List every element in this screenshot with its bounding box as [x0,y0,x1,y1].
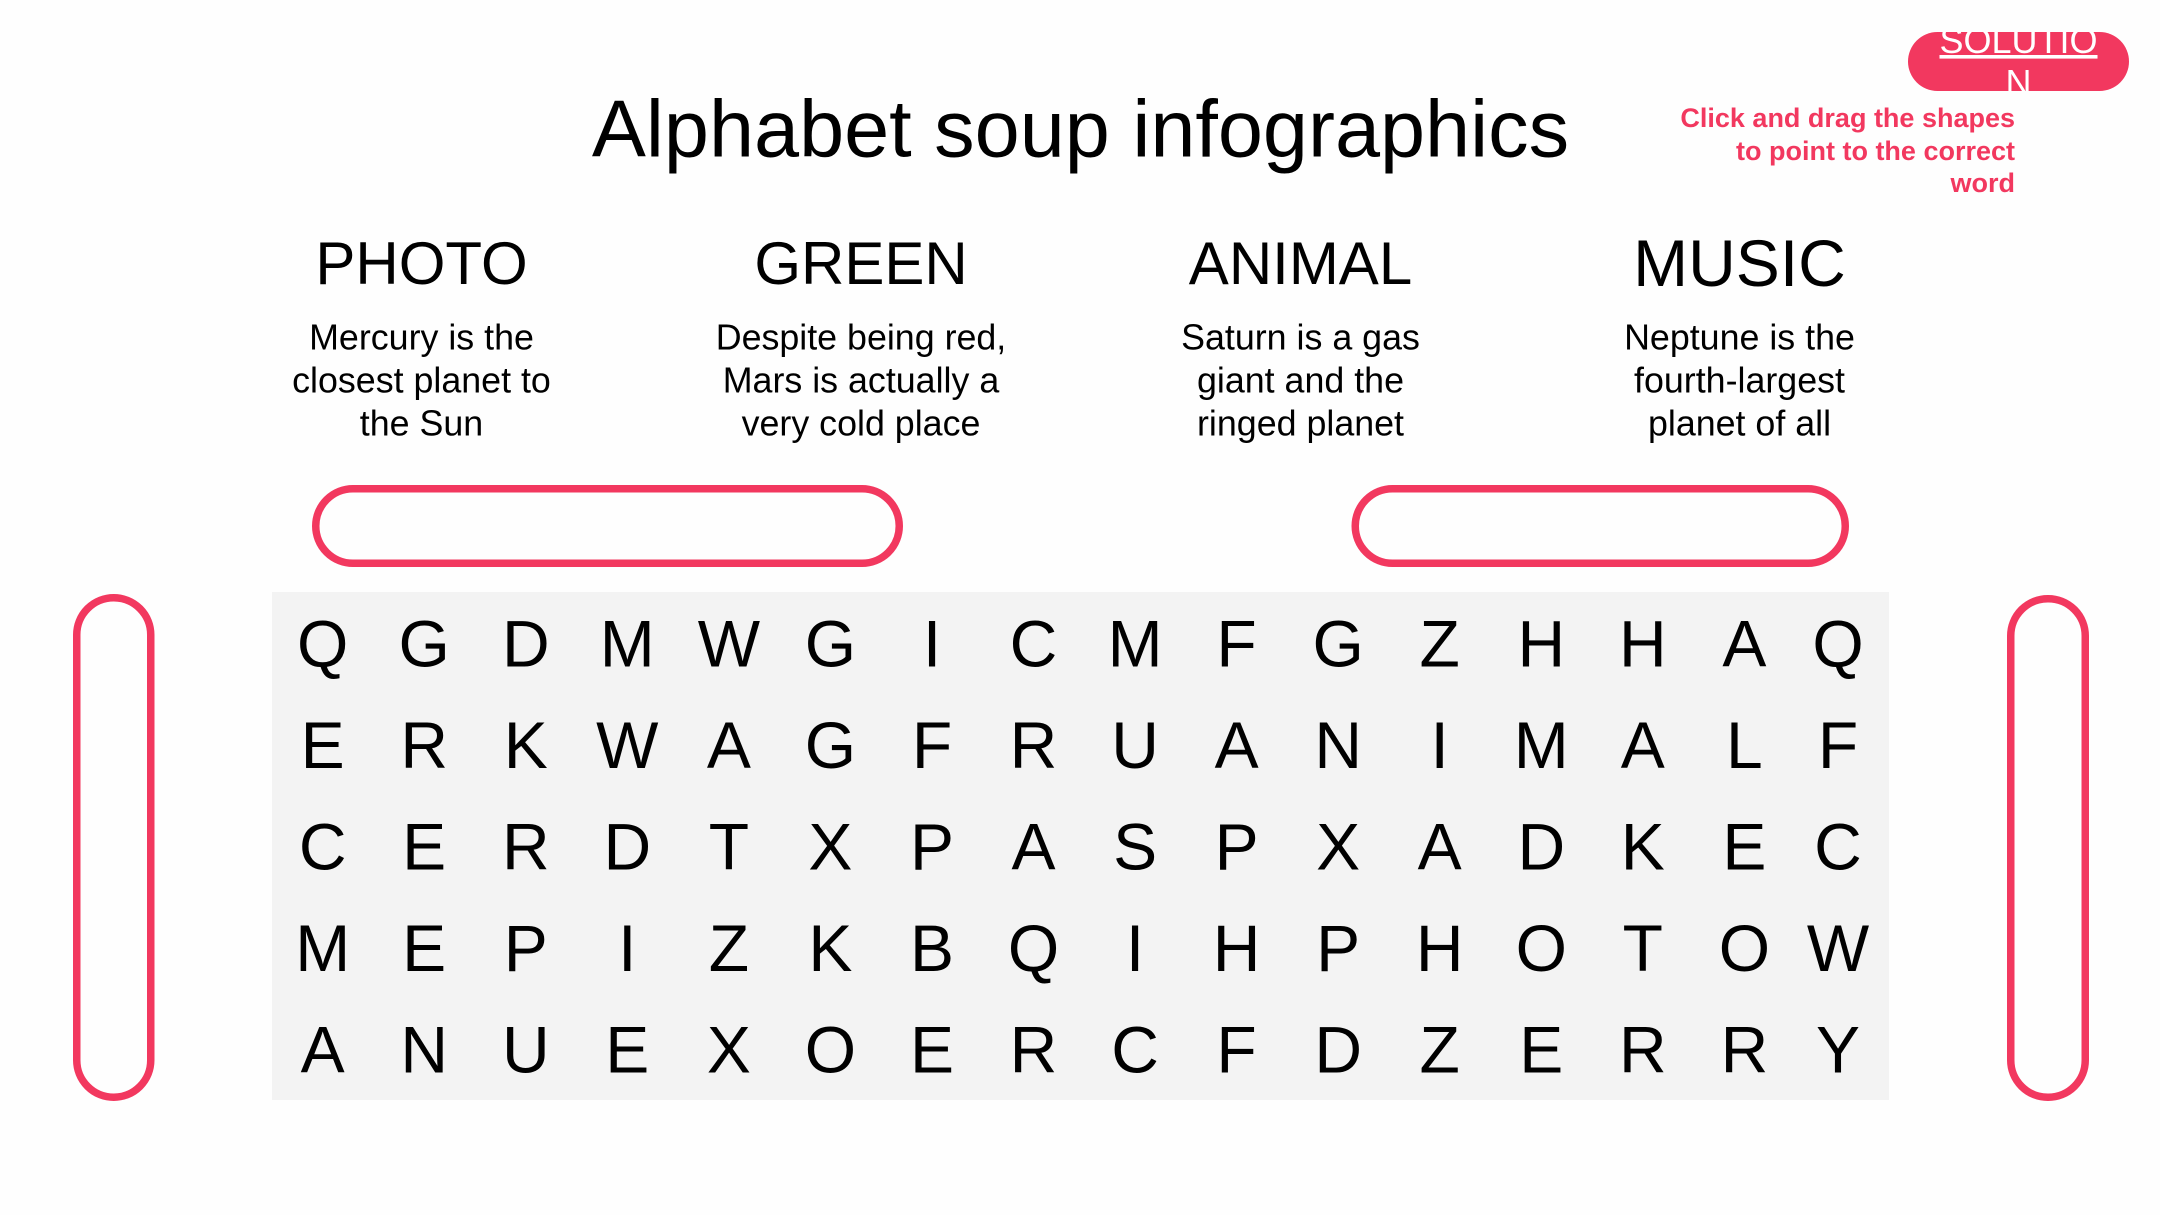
instruction text [1680,103,2015,198]
row 4: Z [709,911,749,985]
row 3: D [603,810,651,884]
top pill outline right [1355,489,1845,563]
row 2: K [504,708,548,782]
row 4: Q [1008,911,1059,985]
row 2: R [400,708,448,782]
row 2: G [805,708,856,782]
row 1: M [1108,606,1163,680]
row 5: O [805,1013,856,1087]
row 4: T [1623,911,1663,985]
row 1: H [1619,606,1667,680]
row 3: K [1621,810,1665,884]
row 5: N [400,1013,448,1087]
row 3: P [910,810,954,884]
column: animal: ringed planet [1197,404,1404,444]
top pill outline left [316,489,899,563]
row 3: A [1011,810,1056,884]
row 4: E [402,911,446,985]
row 4: P [1316,911,1360,985]
row 5: C [1111,1013,1159,1087]
row 3: S [1113,810,1157,884]
row 3: R [502,810,550,884]
instruction text: Click and drag the shapes [1680,103,2015,133]
column: music: MUSIC [1633,226,1846,300]
row 3: T [709,810,749,884]
row 1: C [1010,606,1057,680]
row 4: H [1213,911,1260,985]
row 4: W [1807,911,1870,985]
row 3: D [1517,810,1565,884]
column: photo: PHOTO [315,230,528,297]
row 1: G [399,606,450,680]
column: animal: Saturn is a gas [1181,318,1420,358]
column: animal: giant and the [1197,360,1404,400]
title: Alphabet soup infographics [592,84,1569,174]
row 4: I [1126,911,1144,985]
solution button [1908,32,2129,91]
column: green: Mars is actually a [723,360,999,400]
row 3: X [808,810,852,884]
right vertical pill outline [2011,599,2085,1097]
row 5: R [1721,1013,1768,1087]
column: green: very cold place [742,404,980,444]
row 4: O [1719,911,1770,985]
row 5 [301,1013,1860,1087]
row 5: U [502,1013,550,1087]
row 1: G [805,606,856,680]
row 5: D [1314,1013,1362,1087]
row 2: E [301,708,345,782]
row 2: M [1514,708,1569,782]
row 5: R [1619,1013,1667,1087]
row 3: C [299,810,347,884]
row 4: K [808,911,852,985]
row 1: W [698,606,761,680]
row 2 [301,708,1858,782]
row 1: Q [297,606,348,680]
row 5: Y [1816,1013,1860,1087]
column: music: planet of all [1648,404,1831,444]
row 5: X [707,1013,751,1087]
row 1: H [1517,606,1565,680]
row 2: A [1621,708,1665,782]
row 2: U [1111,708,1159,782]
row 1: G [1313,606,1364,680]
row 5: F [1216,1013,1257,1087]
row 5: A [301,1013,345,1087]
column: music: fourth-largest [1634,360,1845,400]
row 1: I [923,606,941,680]
row 4: B [910,911,954,985]
row 1: A [1722,606,1766,680]
column: animal [1181,230,1420,444]
column: music: Neptune is the [1624,318,1855,358]
instruction text: to point to the correct [1736,136,2015,166]
row 2: I [1431,708,1449,782]
row 2: W [596,708,659,782]
column: photo: closest planet to [292,360,551,400]
row 2: F [912,708,952,782]
row 2: R [1010,708,1057,782]
column: green: GREEN [754,230,968,297]
row 1: M [600,606,655,680]
row 4: M [295,911,350,985]
column: photo: the Sun [360,404,483,444]
letter grid background [272,592,1889,1100]
row 3: E [1722,810,1766,884]
row 1: Q [1812,606,1864,680]
column: green: Despite being red, [716,318,1006,358]
row 3: P [1215,810,1259,884]
instruction text: word [1950,168,2015,198]
row 5: Z [1420,1013,1460,1087]
row 5: E [1519,1013,1563,1087]
row 3: X [1316,810,1360,884]
letter grid [295,606,1870,1087]
row 5: E [605,1013,649,1087]
row 1: Z [1420,606,1460,680]
row 3: E [402,810,446,884]
row 3: A [1418,810,1462,884]
row 5: R [1010,1013,1057,1087]
row 4: H [1416,911,1464,985]
column: music [1624,226,1855,444]
row 3 [299,810,1862,884]
column: photo: Mercury is the [309,318,534,358]
row 1: D [502,606,550,680]
solution button: N [2006,62,2032,103]
row 2: A [1215,708,1259,782]
column: animal: ANIMAL [1189,230,1412,297]
row 1: F [1216,606,1257,680]
row 2: N [1314,708,1362,782]
row 3: C [1814,810,1862,884]
row 2: A [707,708,751,782]
row 4 [295,911,1870,985]
row 4: I [618,911,636,985]
row 2: L [1726,708,1763,782]
solution button: SOLUTIO [1939,20,2098,61]
column: photo [292,230,551,444]
left vertical pill outline [77,598,151,1097]
row 1 [297,606,1864,680]
row 4: P [504,911,548,985]
row 5: E [910,1013,954,1087]
column: green [716,230,1006,444]
row 4: O [1516,911,1567,985]
row 2: F [1818,708,1858,782]
